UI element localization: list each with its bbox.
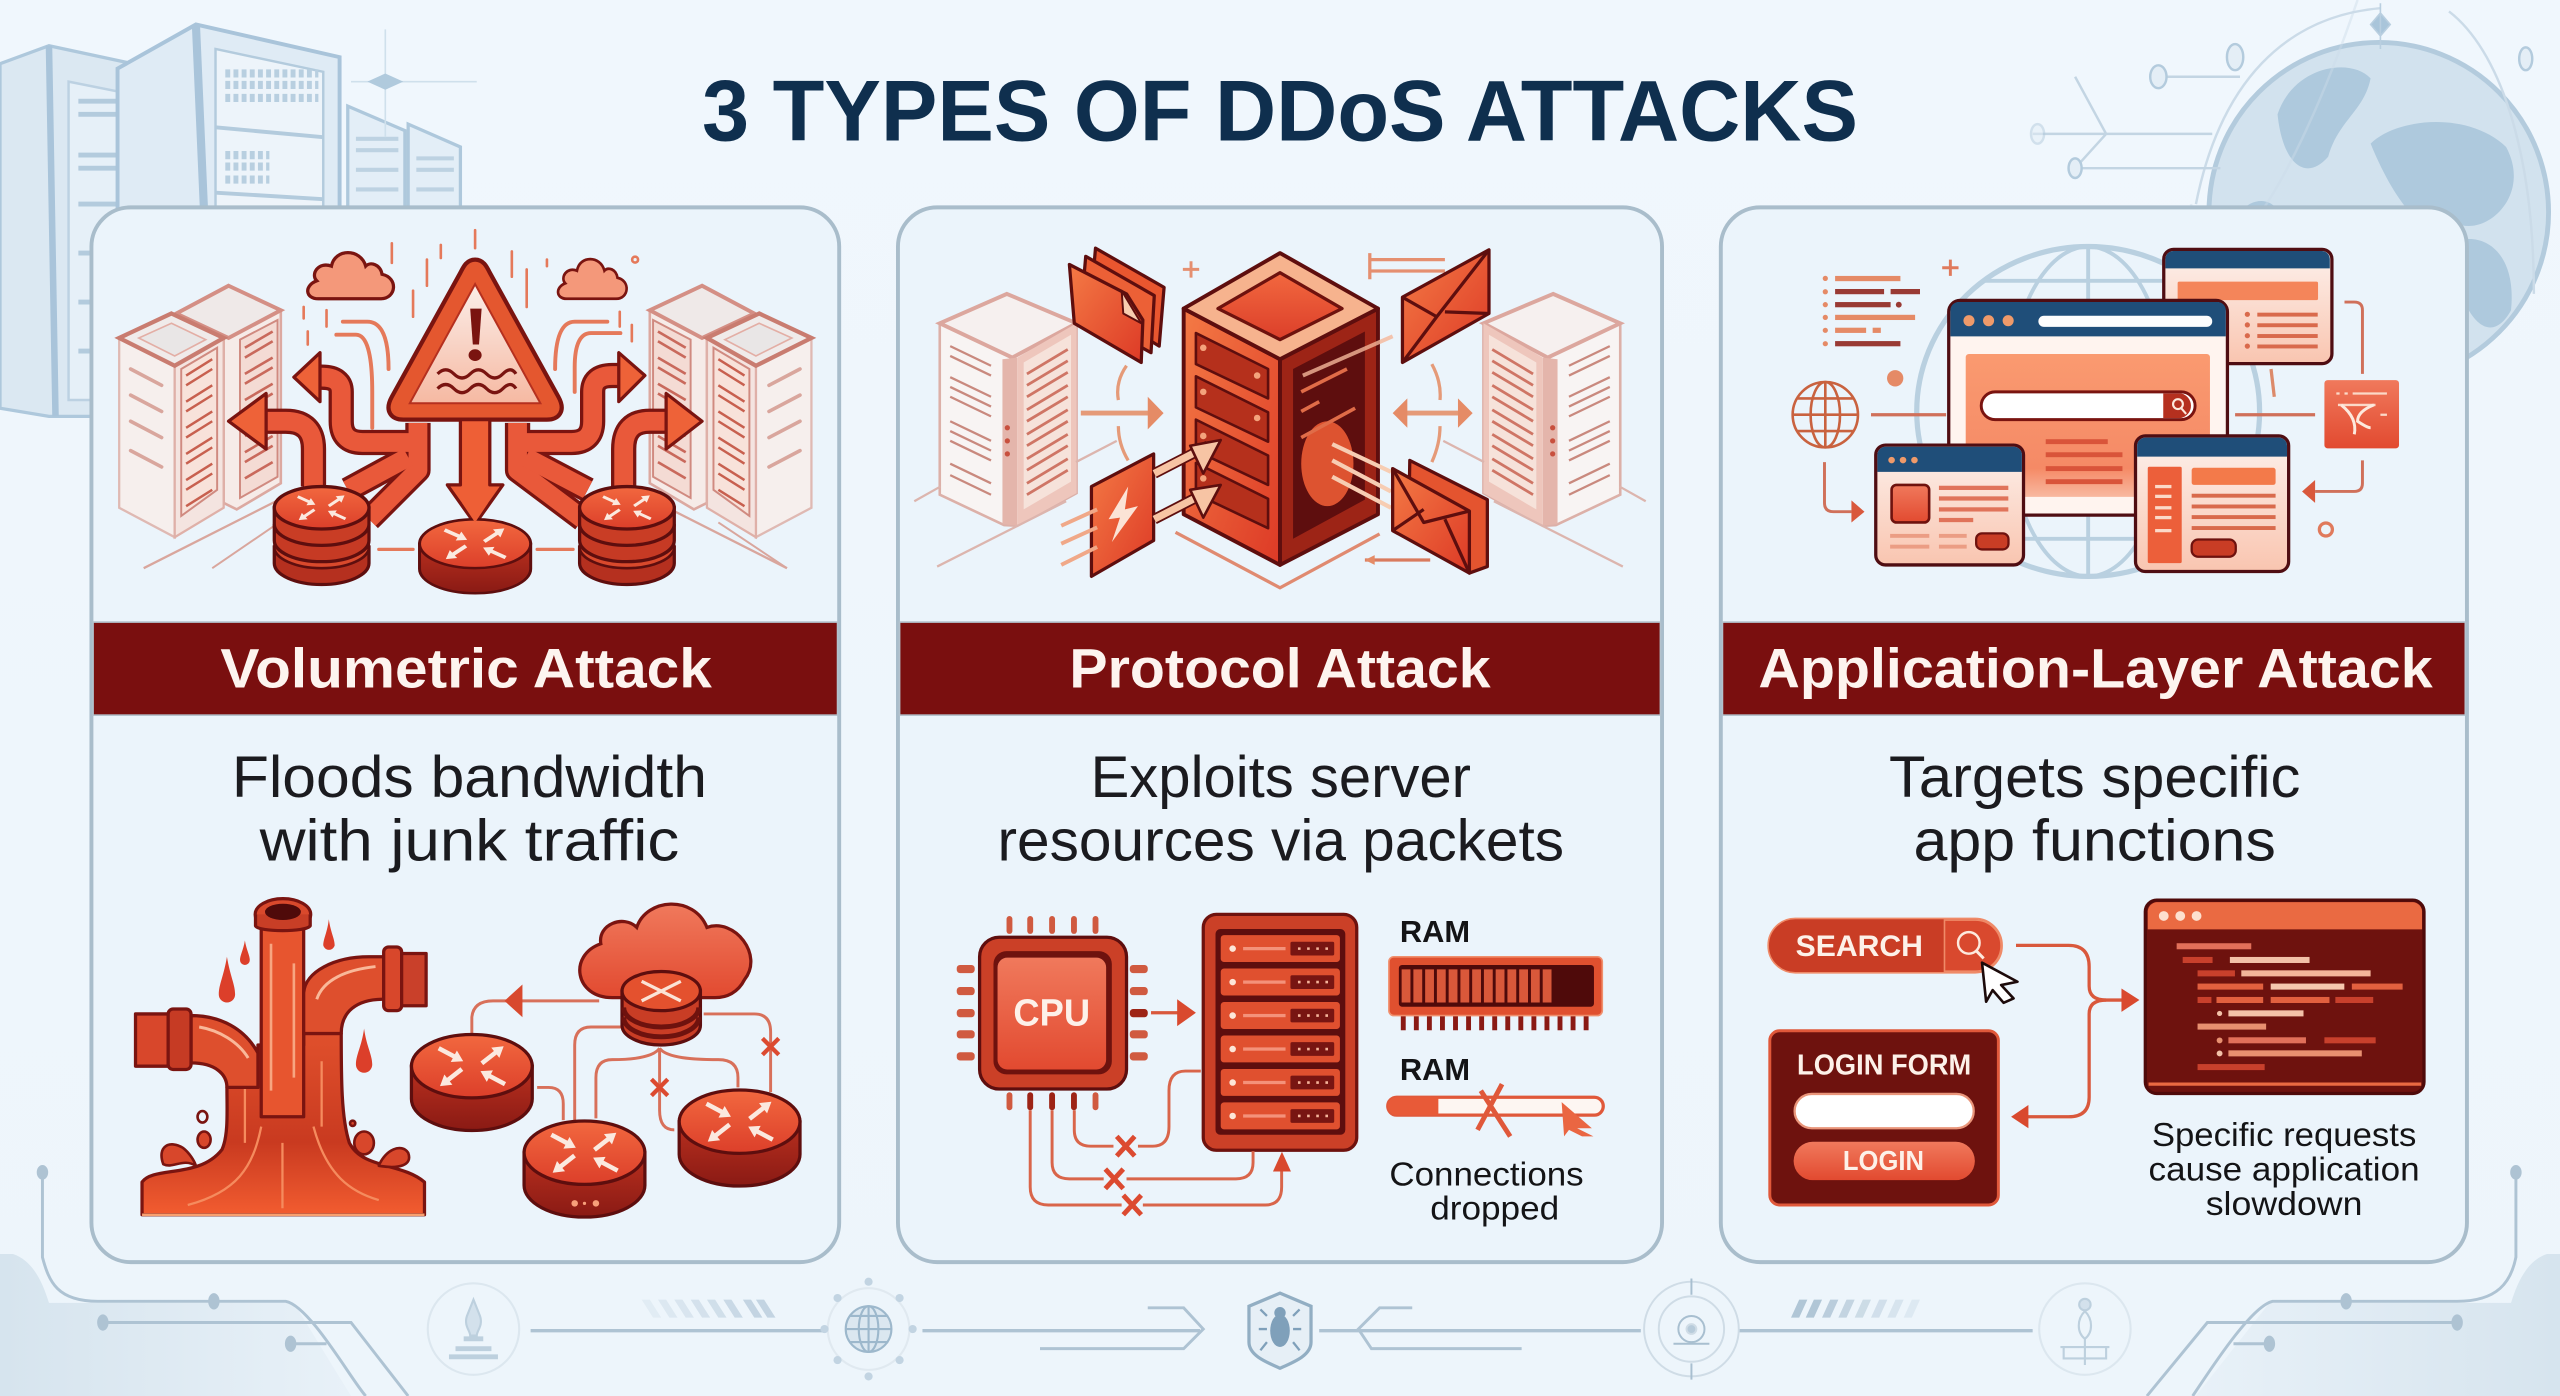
description: Exploits server [1091,745,1471,810]
filter card [2324,380,2399,448]
arrow: CPU to server [1151,999,1196,1026]
top right window [2164,249,2332,364]
description: Targets specific [1889,745,2300,810]
caption: specific requests: slowdown [2206,1186,2362,1223]
caption: connections dropped: dropped [1430,1191,1559,1228]
footer icon: globe [820,1278,917,1380]
description: resources via packets [998,808,1564,873]
ghost server left [914,294,1117,567]
heading bar [93,622,838,715]
heading bar [1722,622,2465,715]
description [232,745,707,873]
small globe [1793,382,1858,447]
description [1889,745,2300,873]
description: Floods bandwidth [232,745,707,810]
panel: application-layer attack [1721,207,2467,1262]
ghost server right [1443,294,1646,567]
illustration: CPU chip: CPU [1013,991,1090,1033]
caption: connections dropped [1389,1156,1584,1228]
background: globe and network [2031,0,2549,382]
clouds [308,253,627,299]
RAM label full: RAM [1400,916,1470,949]
illustration: web application windows [1793,247,2399,576]
warning triangle [389,260,562,420]
background: server towers [0,24,477,416]
code window [2145,900,2424,1093]
RAM label dropped: RAM [1400,1054,1470,1087]
footer icon: right stripes [1791,1300,1920,1318]
heading bar: Protocol Attack [1069,637,1491,699]
flood arrows [229,353,702,519]
server stack right [650,286,811,568]
caption: specific requests [2149,1117,2420,1223]
background globe [1917,247,2260,576]
main browser window [1949,300,2227,515]
plus and dots [1887,260,2332,536]
heading bar: Volumetric Attack [220,637,712,699]
request arrows [2011,945,2139,1128]
heading bar: Application-Layer Attack [1758,637,2433,699]
caption: specific requests: cause application [2149,1151,2420,1188]
panel: protocol attack [898,207,1662,1262]
connections dropped lines [1030,1071,1291,1215]
bottom right window [2136,436,2289,571]
connectors [1824,302,2362,512]
RAM bar crossed out with cursor [1388,1084,1603,1136]
lightning packet [1061,454,1154,576]
footer icon: pawn [428,1283,519,1375]
flow lines [1081,253,1461,588]
illustration: server under packet attack [914,248,1646,588]
illustration: traffic flood warning [119,230,811,593]
caption: connections dropped: Connections [1389,1156,1584,1193]
incoming arrows [1154,440,1391,519]
server stack left [119,286,281,568]
title: 3 TYPES OF DDoS ATTACKS [702,63,1858,159]
illustration: bursting pipes [136,899,426,1215]
flow dashes [304,230,638,549]
envelope bottom [1393,460,1487,573]
background: bottom corner shapes [0,1254,2560,1396]
code lines [1823,276,1920,346]
routers [274,487,369,585]
footer icon: network person [2039,1283,2131,1375]
bottom left window [1876,445,2024,565]
illustration: CPU chip [957,916,1148,1110]
footer icon: left stripes [642,1300,776,1318]
login form: LOGIN FORM [1797,1049,1971,1081]
description: with junk traffic [259,808,679,873]
footer icon: shield with bug [1249,1293,1311,1368]
heading bar [900,622,1660,715]
description [998,745,1564,873]
search bar: SEARCH [1796,930,1923,963]
center arrow [447,420,503,524]
background: circuit traces [37,1165,2522,1396]
envelope top [1402,250,1489,362]
search bar [1768,918,2002,973]
panel: volumetric attack [91,207,839,1262]
caption: specific requests: Specific requests [2152,1117,2416,1154]
description: app functions [1913,808,2276,873]
login form: LOGIN [1843,1145,1924,1176]
folder packets [1069,248,1164,362]
login form [1770,1031,1998,1205]
illustration: server rack [1203,914,1357,1150]
cursor icon [1982,963,2017,1003]
central server [1184,253,1378,565]
RAM module [1389,957,1602,1030]
illustration: router network [411,904,800,1217]
footer icon: target dial [1644,1278,1739,1380]
